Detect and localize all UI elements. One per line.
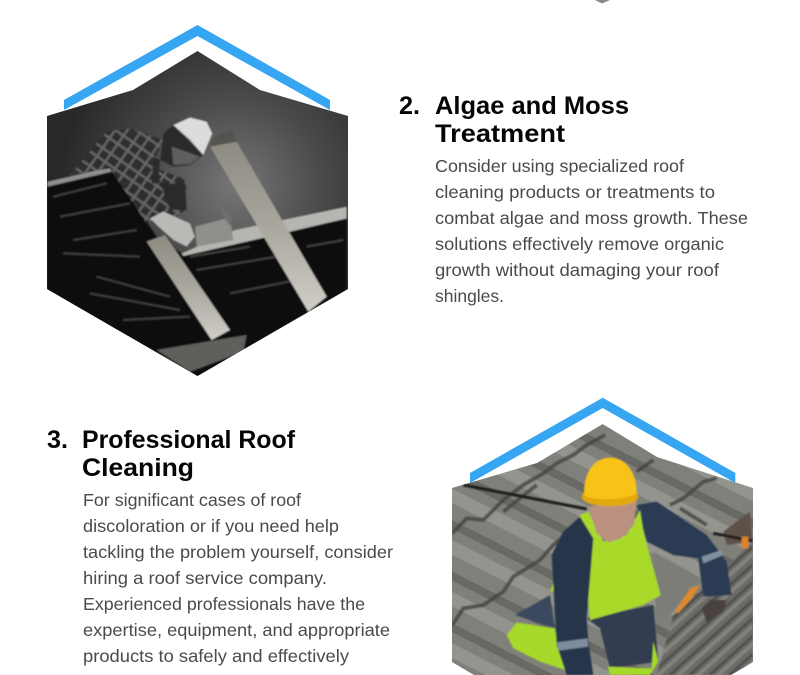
upper right broken tile bbox=[653, 552, 698, 625]
step 2 body text: Consider using specialized roof bbox=[435, 156, 684, 176]
step 3 body text: tackling the problem yourself, consider bbox=[83, 542, 393, 562]
photo: roofer hammering on a beam, black and white bbox=[47, 51, 348, 377]
step 2 body text: growth without damaging your roof bbox=[435, 260, 719, 280]
step 2 body text: cleaning products or treatments to bbox=[435, 182, 715, 202]
lower right roof section bbox=[657, 542, 753, 675]
face and beard bbox=[152, 125, 203, 210]
navy trousers bbox=[587, 605, 658, 668]
plank edge bbox=[47, 167, 112, 187]
step 2 body text: shingles. bbox=[435, 286, 504, 306]
right arm and shoulder bbox=[637, 502, 732, 597]
hammer bbox=[195, 217, 233, 247]
bottom board bbox=[157, 335, 247, 372]
hard hat brim bbox=[580, 492, 640, 507]
right beam end bbox=[210, 130, 236, 146]
left thigh bbox=[515, 595, 555, 628]
step 3 body text: expertise, equipment, and appropriate bbox=[83, 620, 390, 640]
step 3 heading: Cleaning bbox=[82, 454, 194, 482]
step 3 heading bbox=[47, 426, 296, 482]
step 2 body text: solutions effectively remove organic bbox=[435, 234, 724, 254]
step 3 body text: hiring a roof service company. bbox=[83, 568, 327, 588]
lower beam bbox=[147, 235, 230, 340]
step 3 body text: For significant cases of roof bbox=[83, 490, 301, 510]
hi-vis leg bbox=[507, 622, 565, 670]
face bbox=[588, 500, 637, 542]
hi-vis lower trouser band bbox=[608, 642, 658, 675]
step 3 body text bbox=[83, 490, 393, 666]
blue roof outline above photo 2 bbox=[470, 398, 735, 483]
black hose right bbox=[713, 533, 753, 541]
top rail bbox=[182, 207, 347, 256]
glove bbox=[702, 600, 727, 622]
blue roof outline above photo 1 bbox=[64, 25, 330, 110]
left arm of jacket bbox=[552, 517, 593, 675]
step 3 body text: discoloration or if you need help bbox=[83, 516, 339, 536]
step 2 heading: Algae and Moss bbox=[435, 92, 629, 120]
shirt bbox=[70, 128, 187, 223]
step 3 body text: Experienced professionals have the bbox=[83, 594, 365, 614]
left sleeve reflective band bbox=[557, 638, 588, 651]
orange debris bbox=[675, 585, 700, 613]
hand bbox=[150, 212, 195, 247]
step 3 heading: 3. bbox=[47, 426, 68, 454]
step 2 heading: Treatment bbox=[435, 120, 566, 148]
step 2 body text: combat algae and moss growth. These bbox=[435, 208, 748, 228]
step 3 body text: products to safely and effectively bbox=[83, 646, 349, 666]
hard hat dome bbox=[584, 458, 637, 499]
cheek bbox=[172, 147, 200, 165]
step 2 body text bbox=[435, 156, 748, 306]
right beam bbox=[210, 142, 327, 312]
step 3 heading: Professional Roof bbox=[82, 426, 296, 454]
hammer claw bbox=[222, 210, 231, 226]
black hose left bbox=[463, 485, 587, 509]
gutter debris bbox=[723, 512, 753, 545]
roof deck bbox=[47, 168, 347, 377]
photo: roofer in hi-vis gear and yellow hard hat on a corrugated roof bbox=[452, 424, 753, 675]
hard hat bbox=[173, 117, 212, 155]
sleeve reflective band bbox=[702, 550, 723, 563]
step 2 heading: 2. bbox=[399, 92, 420, 120]
tile ridges bbox=[452, 435, 717, 625]
hi-vis vest bbox=[550, 510, 661, 620]
step 2 heading bbox=[399, 92, 629, 148]
hexagon tip from the previous section bbox=[595, 0, 610, 4]
deck wood streaks bbox=[53, 183, 343, 320]
orange clip bbox=[742, 537, 748, 548]
